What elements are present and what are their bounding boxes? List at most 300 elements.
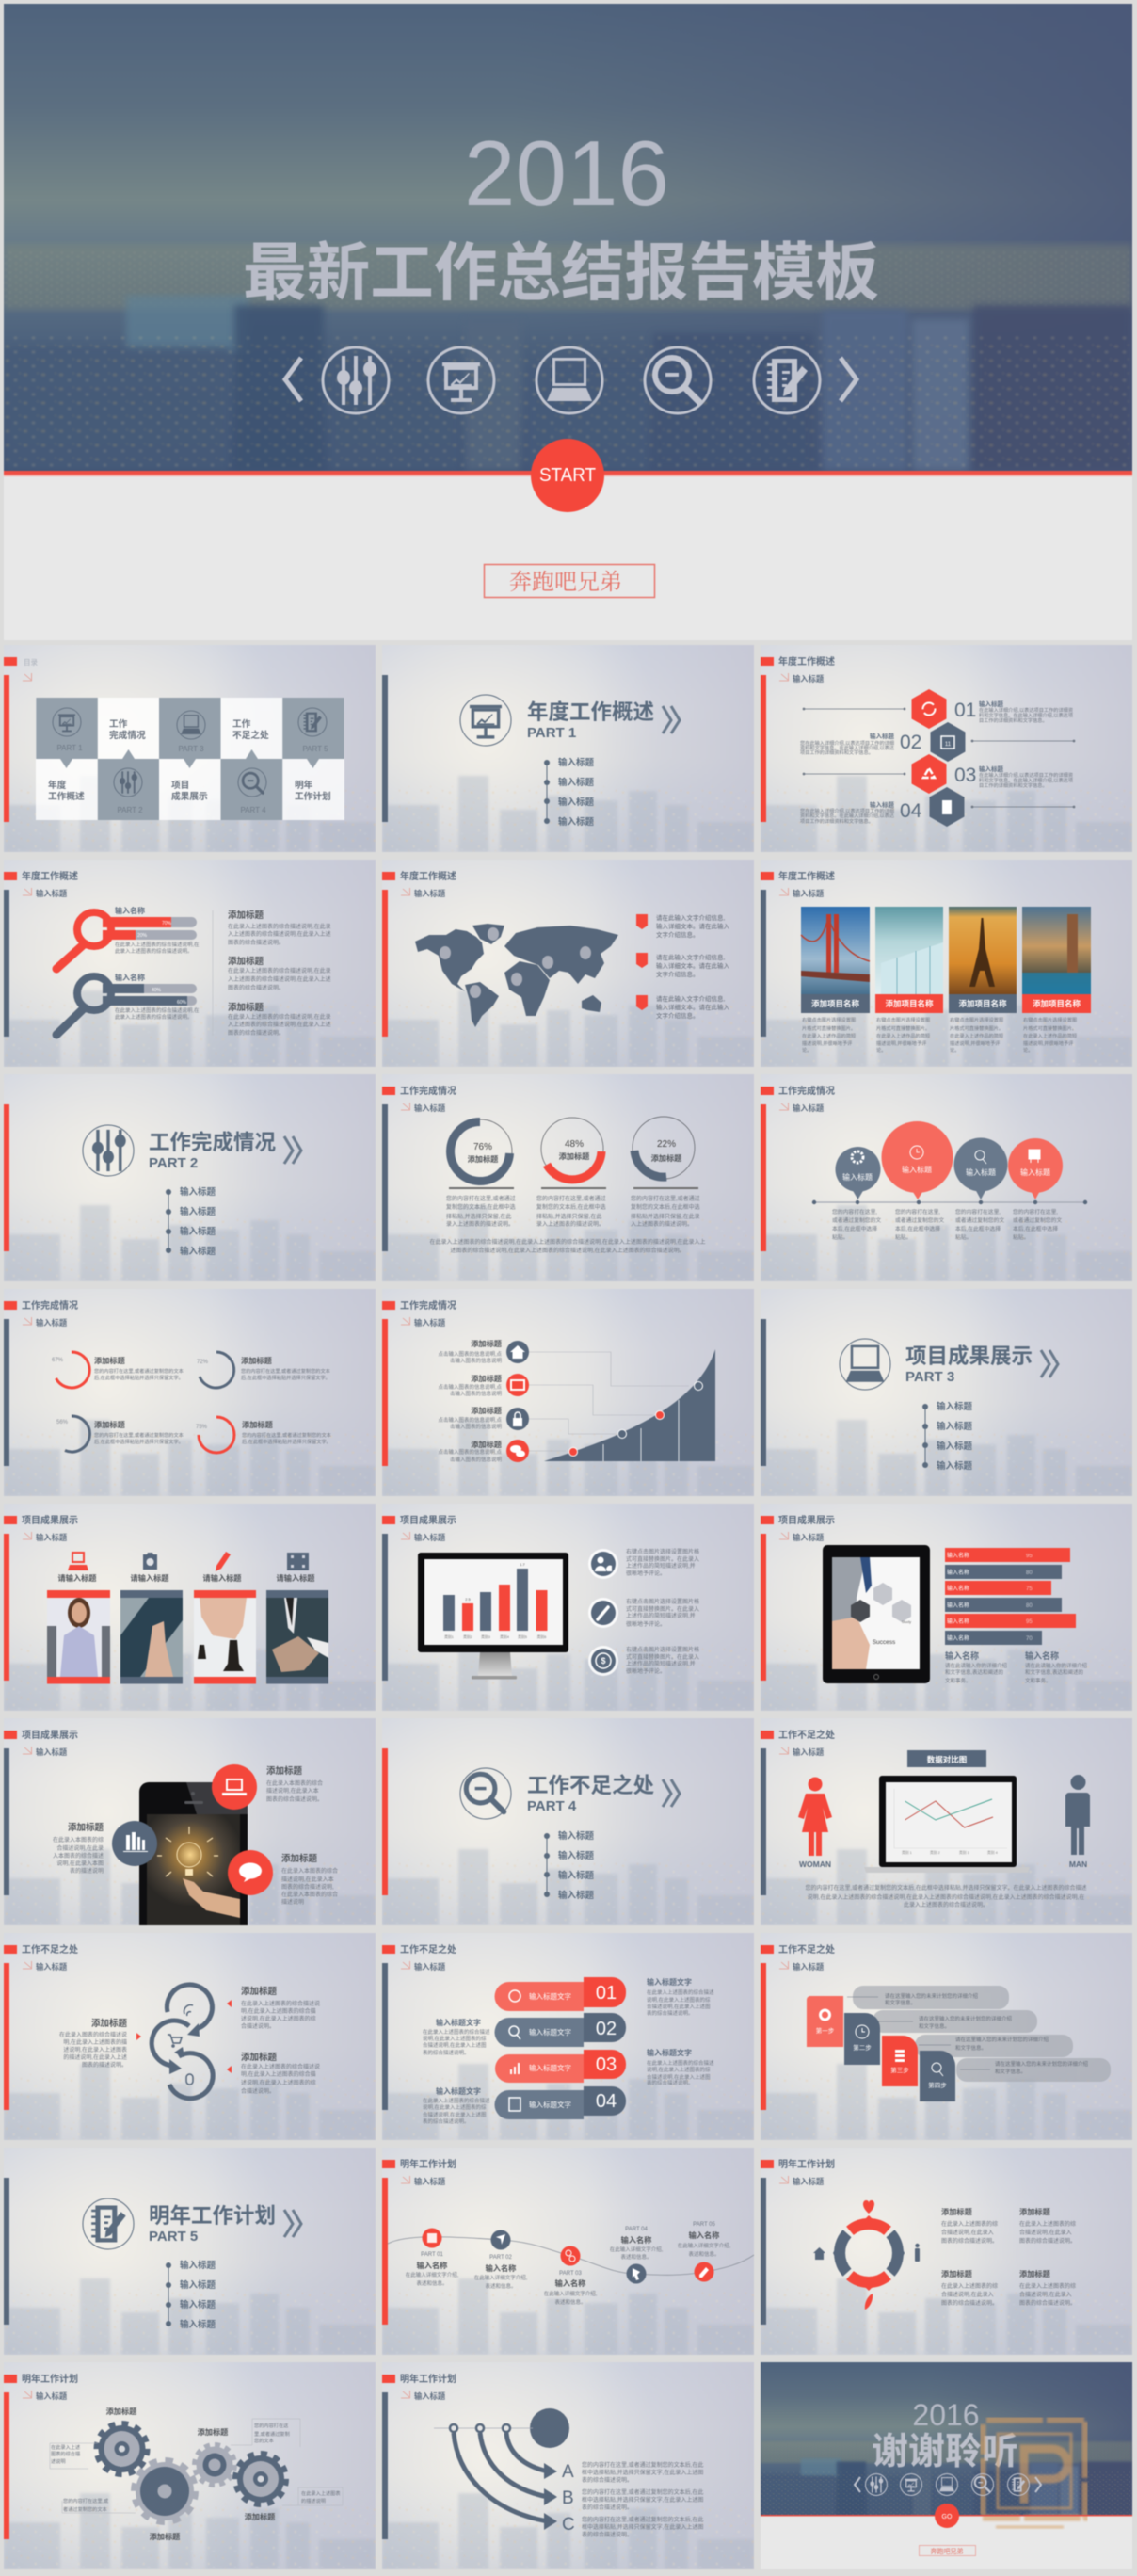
descriptions: 或者通过复制您的文 <box>895 1216 944 1224</box>
cycle rings <box>152 1985 213 2099</box>
pin 4 <box>1008 1138 1063 1199</box>
ring 72% <box>197 1352 330 1388</box>
ring 67%: 67% <box>52 1358 64 1363</box>
header <box>382 2158 456 2170</box>
horizontal bars: 95 <box>1026 1619 1033 1625</box>
right notes <box>647 1977 714 2086</box>
subtitle: 输入标题 <box>36 1318 68 1328</box>
slide: growth curve <box>382 1289 754 1496</box>
column 4 <box>266 1553 328 1683</box>
card: bridge: 在此录入上述作品的简短 <box>802 1032 856 1039</box>
node 4: 输入名称 <box>621 2235 651 2245</box>
item 3 <box>438 1406 529 1430</box>
card: glass building: 论。 <box>876 1046 886 1054</box>
header: 工作不足之处 <box>778 1729 835 1741</box>
item 4: 点击输入图表的信息说明,点 <box>438 1448 502 1456</box>
text blocks: 添加标题 <box>941 2269 972 2278</box>
contents grid: 工作 <box>109 717 128 730</box>
header <box>4 657 38 667</box>
ring 72%: 添加标题 <box>241 1356 272 1365</box>
card: bridge: 添加项目名称 <box>811 999 859 1008</box>
note boxes: 图表的综合描 <box>51 2450 80 2457</box>
right text 1 <box>227 1986 320 2030</box>
red magnifier with bars: 输入名称 <box>115 906 145 915</box>
node 3: 表述和信息。 <box>554 2298 586 2306</box>
card: city tower: 论。 <box>1023 1046 1033 1054</box>
item texts: 在此输入详细介绍,以表达项目工作的详细资 <box>979 771 1073 779</box>
card: eiffel tower <box>949 907 1017 1054</box>
text blocks: 合描述说明,在此录入 <box>1019 2291 1072 2298</box>
step 1: 第一步 <box>816 2026 835 2035</box>
node 2: 表述和信息。 <box>485 2282 517 2290</box>
outline list: 输入标题 <box>558 1850 595 1861</box>
column 2: 请输入标题 <box>131 1573 168 1583</box>
accent bar <box>382 890 388 1037</box>
B text <box>562 2488 703 2511</box>
text blocks: 图表的综合描述说明。 <box>941 2237 998 2245</box>
descriptions: 粘贴。 <box>832 1233 848 1241</box>
subtitle: 输入标题 <box>414 1962 446 1972</box>
header <box>761 655 835 668</box>
leader lines <box>529 1352 689 1451</box>
chevrons <box>284 1136 301 1164</box>
header <box>4 2373 78 2385</box>
red magnifier with bars: 此录入上述图表的综合描述说明。 <box>115 947 193 955</box>
subtitle <box>401 1532 446 1542</box>
tablet <box>823 1545 930 1683</box>
contents grid: 成果展示 <box>171 790 208 802</box>
right text 2: 合描述说明。 <box>241 2087 275 2095</box>
accent bar <box>4 1534 9 1681</box>
year heading: 2016 <box>464 121 669 225</box>
horizontal bars: 70 <box>1026 1636 1033 1642</box>
section icon <box>83 1125 134 1176</box>
node 5 <box>678 2222 731 2282</box>
subtitle: 输入标题 <box>36 1962 68 1972</box>
subtitle: 输入标题 <box>36 2391 68 2401</box>
callout 3: 描述说明,在此录入本 <box>281 1876 334 1883</box>
header: 工作不足之处 <box>400 1943 456 1956</box>
item 3: $ <box>601 1656 606 1666</box>
slide: section 5 divider <box>4 2148 376 2355</box>
text blocks: 图表的综合描述说明。 <box>1019 2299 1076 2307</box>
blue magnifier with bars: 在此录入上述图表的综合描述说明,在 <box>115 1006 200 1014</box>
header: 年度工作概述 <box>778 655 835 668</box>
item 2: 很晰地予评论。 <box>626 1620 665 1628</box>
numbers: 04 <box>900 800 922 822</box>
timeline <box>812 1200 1087 1204</box>
descriptions: 您的内容打在这里, <box>832 1208 877 1216</box>
pill 01: 输入标题文字 <box>529 1991 571 2001</box>
item 1: 式可直接替换图片。在此录入 <box>626 1555 699 1563</box>
subtitle <box>779 888 825 898</box>
slide: section 3 divider <box>761 1289 1132 1496</box>
right text 2: 在此录入上述图表的综合描述说 <box>241 2063 320 2070</box>
left text: 图表的描述说明。 <box>82 2061 127 2069</box>
step 3: 第三步 <box>890 2066 909 2074</box>
chart title <box>907 1750 986 1767</box>
card: bridge: 右键点击图片选择设置图 <box>802 1016 856 1023</box>
A text: 您的内容打在这里,或者通过复制您的文本后,在此 <box>582 2461 703 2469</box>
callout 3: 图表的综合描述说明, <box>281 1883 334 1891</box>
summary text <box>429 1238 706 1254</box>
subtitle: 输入标题 <box>793 1962 825 1972</box>
title slide <box>4 4 1132 640</box>
ring 75%: 75% <box>196 1425 208 1430</box>
card: bridge <box>801 907 870 1054</box>
outline list: 输入标题 <box>180 2299 216 2310</box>
item 3: 击输入图表的信息说明 <box>450 1423 502 1430</box>
subtitle: 输入标题 <box>414 2177 446 2186</box>
column descriptions: 择粘贴,并选择只保留,在此 <box>536 1213 601 1220</box>
outline list: 输入标题 <box>937 1401 973 1412</box>
description: 说明,在此录入上述图表的综合描述说明,在此录入上述图表的综合描述说明,在此录入上述图表的综合描述说明,在 <box>808 1893 1084 1901</box>
laptop with line chart: 类别 4 <box>987 1850 998 1855</box>
header <box>382 2373 456 2385</box>
ring 75%: 您的内容打在这里,或者通过复制您的文本 <box>242 1431 331 1439</box>
item 3 <box>588 1646 699 1676</box>
captions: 文和事务。 <box>1025 1677 1051 1684</box>
captions: 输入名称 <box>1025 1650 1059 1661</box>
accent bar <box>382 1319 388 1466</box>
header <box>4 1514 78 1526</box>
slide: cycle arrows <box>4 1933 376 2140</box>
text blocks: 图表的综合描述说明。 <box>941 2299 998 2307</box>
ring 72%: 72% <box>197 1360 209 1365</box>
section title: 年度工作概述 <box>527 700 654 724</box>
captions: 请在此读输入你的详细介绍 <box>945 1662 1008 1669</box>
card: city tower: 片格式可直接替换图片。 <box>1023 1024 1077 1032</box>
subtitle: 输入标题 <box>793 889 825 898</box>
header: 年度工作概述 <box>400 870 456 882</box>
map legend: 输入详细文本。请在此输入 <box>656 922 730 930</box>
donut 48%: 48% <box>565 1139 584 1150</box>
section title: 工作不足之处 <box>527 1773 655 1797</box>
callout 3 <box>228 1850 338 1906</box>
outline list: 输入标题 <box>558 1890 595 1901</box>
pill 02: 02 <box>596 2019 617 2039</box>
big circle <box>530 2408 569 2448</box>
section icon <box>460 1768 511 1819</box>
subtitle: 输入标题 <box>793 1747 825 1757</box>
contents grid <box>36 698 344 820</box>
subtitle <box>23 1532 68 1542</box>
part label: PART 5 <box>149 2229 198 2245</box>
slide: phone with bulb <box>4 1718 376 1925</box>
captions: 文和事务。 <box>945 1677 971 1684</box>
accent bar <box>761 890 766 1037</box>
accent bar <box>761 2178 766 2325</box>
descriptions: 粘贴。 <box>955 1233 971 1241</box>
column descriptions: 复制您的文本后,在此框中选 <box>631 1203 700 1211</box>
horizontal bars: 输入名称 <box>947 1585 969 1592</box>
curved arrows <box>434 2424 557 2530</box>
item 4: 添加标题 <box>471 1440 502 1449</box>
node 1: 表述和信息。 <box>416 2279 448 2287</box>
card: glass building: 在此录入上述作品的简短 <box>876 1032 930 1039</box>
column 1: 请输入标题 <box>58 1573 96 1583</box>
contents grid: 工作计划 <box>295 790 331 802</box>
item 1: 右键点击图片选择设置图片格 <box>626 1548 699 1555</box>
item 4 <box>438 1440 529 1463</box>
node 4: PART 04 <box>625 2227 648 2232</box>
section title: 工作完成情况 <box>149 1131 277 1154</box>
map legend <box>636 913 730 1020</box>
item texts: 输入标题 <box>979 765 1003 773</box>
outline list <box>166 1186 216 1257</box>
header <box>761 2158 835 2170</box>
header: 工作不足之处 <box>22 1943 78 1956</box>
map legend: 输入详细文本。请在此输入 <box>656 961 730 970</box>
subtitle <box>779 1961 825 1972</box>
column descriptions: 录入上述图表的描述说明。 <box>536 1220 604 1228</box>
left notes: 合描述说明,在此录入上述图 <box>423 2041 487 2049</box>
subtitle <box>779 673 825 684</box>
horizontal bars: 输入名称 <box>947 1602 969 1609</box>
item 2: 式可直接替换图片。在此录入 <box>626 1605 699 1613</box>
card: eiffel tower: 描述说明,并很晰地予评 <box>950 1039 1000 1047</box>
column descriptions <box>446 1195 700 1228</box>
outline list: 输入标题 <box>180 2279 216 2291</box>
blue magnifier with bars <box>56 973 200 1035</box>
header <box>4 1943 78 1956</box>
ring 75%: 后,在此框中选择粘贴并选择只保留文字。 <box>242 1438 331 1445</box>
item texts: 目工作的详细资料和文字信息。 <box>979 781 1048 789</box>
section title: 明年工作计划 <box>149 2204 276 2228</box>
callout 2: 添加标题 <box>68 1822 104 1833</box>
card: eiffel tower: 右键点击图片选择设置图 <box>950 1016 1003 1023</box>
node 3 <box>544 2246 598 2306</box>
node 5: 在此输入详细文字介绍, <box>678 2242 731 2249</box>
descriptions: 您的内容打在这里, <box>955 1208 1001 1216</box>
left notes: 输入标题文字 <box>436 2086 481 2096</box>
outline list: 输入标题 <box>180 1186 216 1198</box>
outline list: 输入标题 <box>558 777 595 788</box>
slide: magnifier bars <box>4 860 376 1067</box>
node 2: PART 02 <box>489 2255 512 2261</box>
text blocks: 添加标题 <box>1019 2207 1050 2216</box>
contents grid: PART 4 <box>240 806 266 814</box>
left notes: 在此录入上述图表的综合描述 <box>423 2097 490 2104</box>
header <box>382 1943 456 1956</box>
numbers: 03 <box>954 765 976 786</box>
outline list: 输入标题 <box>937 1421 973 1432</box>
accent bar <box>761 1963 766 2110</box>
bar chart: 类别5 <box>518 1634 527 1639</box>
header: 明年工作计划 <box>400 2373 456 2385</box>
header <box>4 1299 78 1312</box>
right notes: 合描述说明,在此录入上述图 <box>647 2003 711 2010</box>
C text: 您的内容打在这里,或者通过复制您的文本后,在此 <box>582 2516 703 2523</box>
text blocks: 合描述说明,在此录入 <box>1019 2229 1072 2236</box>
contents grid: PART 2 <box>117 806 143 814</box>
red divider line <box>4 471 1132 476</box>
slide: ABC arrows <box>382 2362 754 2569</box>
C text: 表的综合描述说明。 <box>582 2531 633 2538</box>
slide: section 2 divider <box>4 1074 376 1281</box>
A text: A <box>562 2462 574 2482</box>
text blocks: 在此录入上述图表的综 <box>941 2282 998 2290</box>
note boxes: 者通过复制您的文本 <box>63 2505 107 2513</box>
world map <box>415 924 618 1027</box>
subtitle <box>23 1317 68 1328</box>
contents grid: 完成情况 <box>109 729 146 741</box>
header: 明年工作计划 <box>22 2373 78 2385</box>
header <box>761 870 835 882</box>
bar chart: 类别2 <box>463 1634 472 1639</box>
right notes: 输入标题文字 <box>647 2048 692 2057</box>
note boxes: 您的文本 <box>254 2437 274 2444</box>
item 2 <box>438 1374 529 1397</box>
right text 1: 述说明,在此录入上述图表的综 <box>241 2015 316 2022</box>
map legend: 文字介绍信息。 <box>656 1011 698 1020</box>
text blocks: 在此录入上述图表的综 <box>1019 2282 1076 2290</box>
tablet: Study <box>902 1619 911 1624</box>
pin 3 <box>954 1137 1007 1199</box>
callout 2 <box>53 1821 157 1875</box>
item 1: 点击输入图表的信息说明,点 <box>438 1350 502 1358</box>
column descriptions: 录入上述图表的描述说明。 <box>446 1220 514 1228</box>
item texts: 目工作的详细资料和文字信息。 <box>979 716 1048 724</box>
left text: 的描述说明,在此录入上述 <box>63 2053 127 2061</box>
contents grid: PART 5 <box>302 745 328 753</box>
accent bar <box>382 675 388 822</box>
callout 2: 在此录入本图表的综 <box>53 1836 104 1843</box>
card: eiffel tower: 添加项目名称 <box>958 999 1007 1008</box>
pill 03: 输入标题文字 <box>529 2063 571 2072</box>
chevrons <box>1041 1350 1058 1377</box>
blue magnifier with bars: 输入名称 <box>115 973 145 982</box>
ring 56%: 后,在此框中选择粘贴并选择只保留文字。 <box>94 1438 184 1445</box>
card: bridge: 描述说明,并很晰地予评 <box>802 1039 852 1047</box>
icon row <box>855 2474 1041 2495</box>
item texts: 资料和文字信息。在此输入详细介绍,以表达 <box>800 812 894 819</box>
item 3: 右键点击图片选择设置图片格 <box>626 1646 699 1653</box>
card: glass building: 片格式可直接替换图片。 <box>876 1024 930 1032</box>
contents grid: 项目 <box>171 780 189 791</box>
donut 48%: 添加标题 <box>559 1151 589 1161</box>
author label: 奔跑吧兄弟 <box>509 563 622 596</box>
accent bar <box>4 1104 9 1251</box>
item 2 <box>588 1598 699 1628</box>
bar chart: 2.5 <box>465 1597 472 1602</box>
step notes: 请在这里输入您的未来计划您的详细介绍 <box>955 2036 1049 2043</box>
donut 48% <box>541 1118 603 1180</box>
right text 2: 明,在此录入上述图表的综合描 <box>241 2070 316 2078</box>
right text blocks: 图表的综合描述说明。 <box>228 984 284 991</box>
slide: four steps <box>761 1933 1132 2140</box>
subtitle: 输入标题 <box>414 1533 446 1542</box>
slide: contents <box>4 645 376 852</box>
card: eiffel tower: 在此录入上述作品的简短 <box>950 1032 1003 1039</box>
header <box>761 1729 835 1741</box>
subtitle: 输入标题 <box>793 674 825 684</box>
subtitle <box>401 2176 446 2186</box>
captions <box>945 1650 1088 1684</box>
right text blocks: 入上述图表的综合描述说明,在此录入上述 <box>228 1021 331 1028</box>
note boxes: 里,或者通过复制 <box>254 2430 290 2438</box>
descriptions: 您的内容打在这里, <box>1013 1208 1058 1216</box>
right notes: 表的综合描述说明。 <box>647 2009 694 2017</box>
section title: 项目成果展示 <box>905 1344 1033 1368</box>
callout 1: 添加标题 <box>266 1765 303 1777</box>
donut 22%: 22% <box>657 1139 676 1150</box>
callout 2: 入本图表的综合描述 <box>53 1852 104 1860</box>
card: glass building <box>875 907 943 1054</box>
outline list: 输入标题 <box>558 797 595 808</box>
descriptions: 本后,在此框中选择 <box>955 1225 1001 1232</box>
step notes <box>847 1986 1111 2082</box>
descriptions: 粘贴。 <box>1013 1233 1029 1241</box>
slide: ring diagram <box>761 2148 1132 2355</box>
pill 03: 03 <box>596 2054 617 2075</box>
item texts: 输入标题 <box>979 700 1003 708</box>
closing title: 谢谢聆听 <box>872 2432 1018 2472</box>
item 2: 添加标题 <box>471 1374 502 1383</box>
subtitle: 输入标题 <box>36 1747 68 1757</box>
text blocks: 图表的综合描述说明。 <box>1019 2237 1076 2245</box>
slide: photo cards <box>761 860 1132 1067</box>
right text 1: 明,在此录入上述图表的综合描 <box>241 2007 316 2015</box>
left notes: 说明,在此录入上述图表的综 <box>423 2035 487 2042</box>
item 1: 很晰地予评论。 <box>626 1570 665 1577</box>
right notes: 在此录入上述图表的综合描述 <box>647 2059 714 2067</box>
column descriptions: 择粘贴,并选择只保留,在此 <box>446 1213 511 1220</box>
accent bar <box>382 1104 388 1251</box>
man figure <box>1065 1775 1090 1869</box>
ring 75% <box>196 1417 331 1453</box>
rule lines <box>449 1187 698 1189</box>
step 4 <box>920 2051 955 2101</box>
descriptions: 粘贴。 <box>895 1233 911 1241</box>
ring 56% <box>56 1416 184 1452</box>
subtitle: 输入标题 <box>793 1103 825 1113</box>
left notes: 说明,在此录入上述图表的综 <box>423 2103 487 2111</box>
header: 工作完成情况 <box>22 1299 78 1312</box>
card: city tower: 添加项目名称 <box>1033 999 1081 1008</box>
chart title: 数据对比图 <box>927 1755 967 1764</box>
header: 年度工作概述 <box>778 870 835 882</box>
hexagons <box>911 689 966 827</box>
outline list: 输入标题 <box>937 1460 973 1472</box>
item texts: 项目工作的详细资料和文字信息。 <box>800 817 873 825</box>
subtitle <box>23 2391 68 2401</box>
item texts: 资料和文字信息。在此输入详细介绍,以表达 <box>800 744 894 751</box>
note boxes: 您的内容打在这 <box>254 2422 288 2429</box>
card: city tower: 描述说明,并很晰地予评 <box>1023 1039 1073 1047</box>
slide: world map <box>382 860 754 1067</box>
accent bar <box>4 2392 9 2539</box>
pin 2: 输入标题 <box>902 1165 932 1174</box>
header: 年度工作概述 <box>22 870 78 882</box>
header <box>761 1514 835 1526</box>
ring 67% <box>52 1352 184 1388</box>
accent bar <box>382 1748 388 1895</box>
item 1: 上述作品的简短描述说明,并 <box>626 1562 696 1570</box>
header: 项目成果展示 <box>400 1514 456 1526</box>
main title: 最新工作总结报告模板 <box>243 238 879 309</box>
drop icon <box>865 2294 873 2310</box>
gear labels <box>106 2407 275 2541</box>
column descriptions: 复制您的文本后,在此框中选 <box>536 1203 606 1211</box>
gear labels: 添加标题 <box>198 2427 228 2437</box>
horizontal bars: 75 <box>1026 1586 1033 1592</box>
outline list: 输入标题 <box>180 1226 216 1237</box>
contents grid: 年度 <box>48 779 67 791</box>
bar chart <box>443 1562 548 1639</box>
section icon <box>840 1339 890 1390</box>
right text blocks: 在此录入上述图表的综合描述说明,在此录 <box>228 923 331 930</box>
